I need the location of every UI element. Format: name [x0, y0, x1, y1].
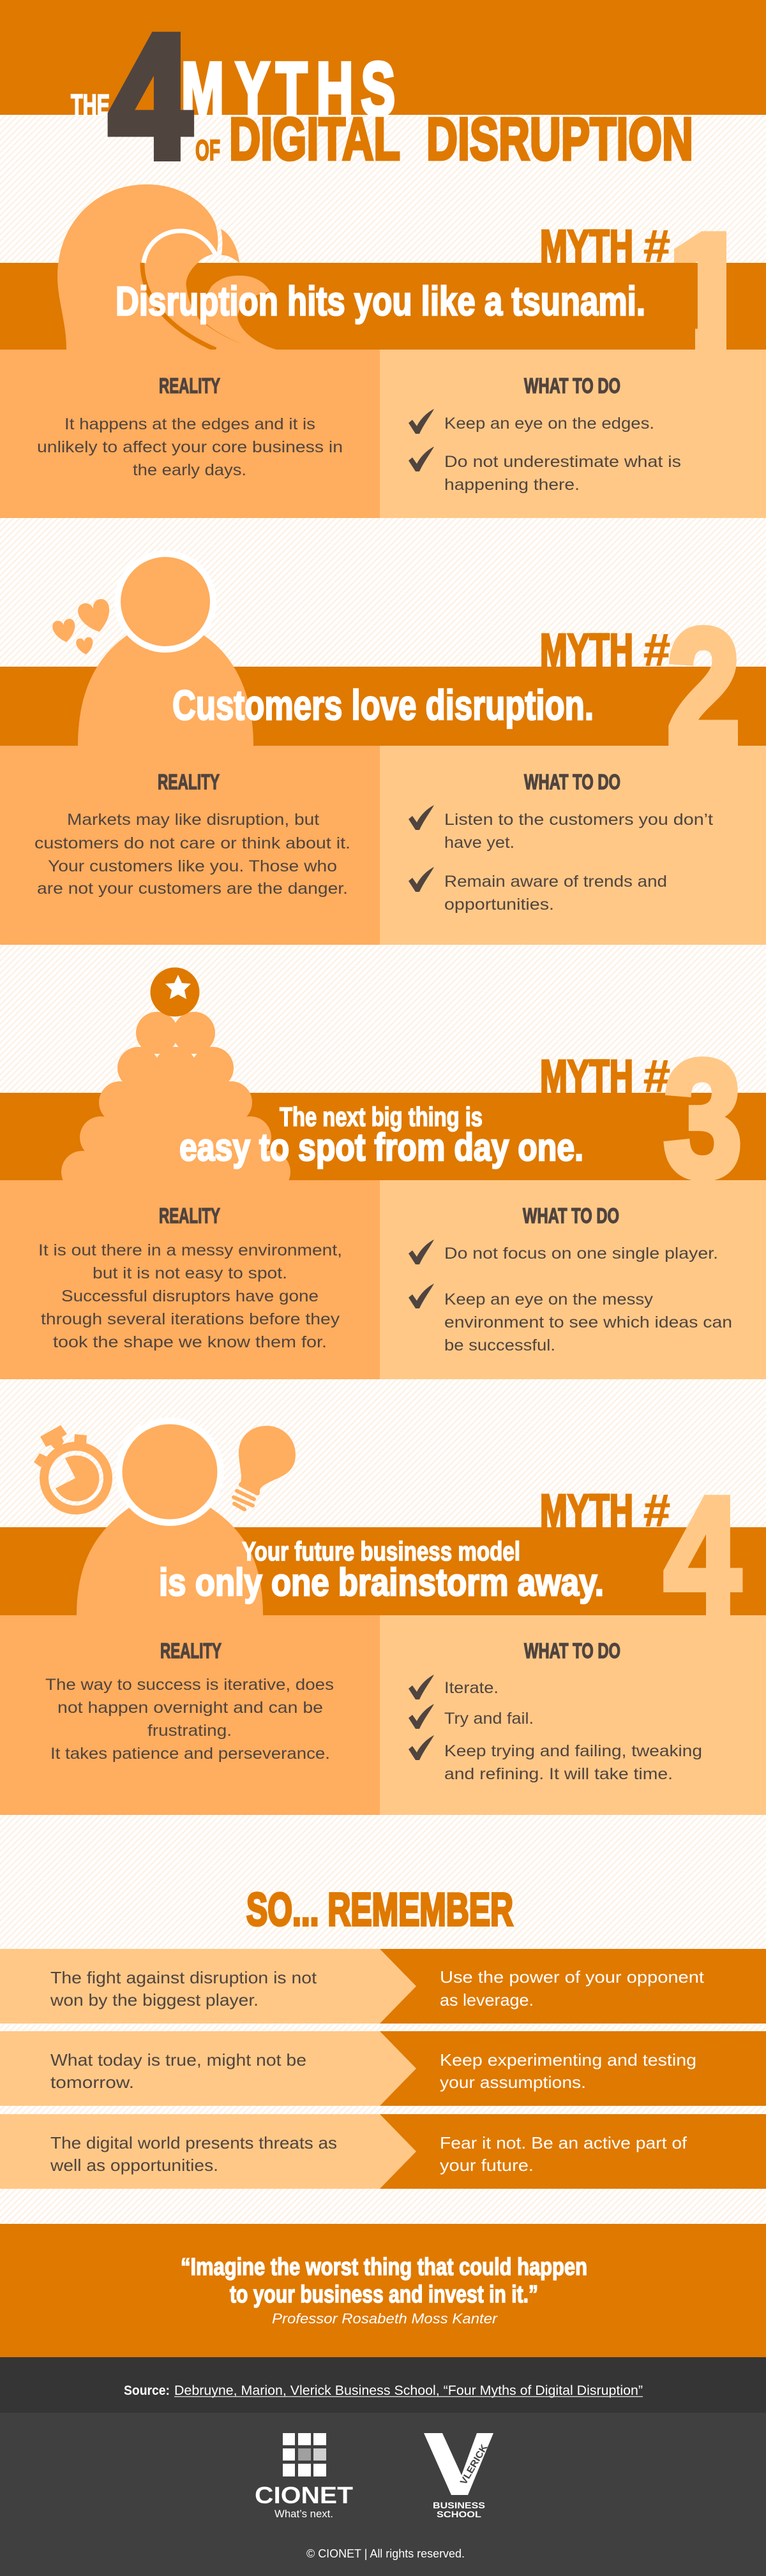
remember row 2 — [0, 2031, 766, 2106]
quote panel: Professor Rosabeth Moss Kanter — [272, 2311, 499, 2327]
what to do box: opportunities. — [444, 896, 554, 914]
remember row 3 — [0, 2114, 766, 2189]
myth label: MYTH — [540, 1486, 633, 1536]
title — [71, 0, 693, 194]
panel: myth 3 — [0, 967, 766, 1379]
what to do box: Keep an eye on the messy — [444, 1291, 654, 1308]
reality box: Successful disruptors have gone — [61, 1287, 319, 1305]
reality box: REALITY — [159, 1204, 220, 1227]
panel: myth 4 — [0, 1418, 766, 1815]
what to do box: WHAT TO DO — [524, 770, 620, 794]
remember row 1 — [0, 1949, 766, 2024]
logo: CIONET: What’s next. — [274, 2508, 333, 2520]
what to do box: environment to see which ideas can — [444, 1314, 732, 1331]
myth headline: easy to spot from day one. — [179, 1126, 583, 1169]
myth label: # — [643, 1486, 670, 1536]
reality box: It happens at the edges and it is — [64, 415, 315, 433]
remember row 3: Fear it not. Be an active part of — [440, 2133, 687, 2152]
what to do box: Listen to the customers you don’t — [444, 811, 713, 829]
logo: CIONET — [255, 2433, 353, 2520]
reality box: but it is not easy to spot. — [93, 1264, 287, 1282]
logo: CIONET: CIONET — [255, 2482, 353, 2508]
logo: Vlerick: VLERICK — [458, 2443, 490, 2487]
icon: person with hearts — [52, 551, 253, 746]
what to do box: Do not underestimate what is — [444, 453, 681, 471]
number 1: 1 — [663, 200, 755, 385]
what to do box: WHAT TO DO — [523, 1204, 619, 1227]
reality box: It takes patience and perseverance. — [50, 1745, 330, 1763]
myth label: MYTH — [540, 1051, 633, 1102]
reality box — [0, 1615, 380, 1815]
what to do box: be successful. — [444, 1336, 555, 1354]
what to do box: WHAT TO DO — [524, 374, 620, 397]
title: THE — [71, 88, 110, 122]
title: 4 — [109, 0, 191, 194]
myth label: # — [643, 1051, 670, 1102]
source bar: Debruyne, Marion, Vlerick Business School, “Four Myths of Digital Disruption” — [174, 2383, 643, 2398]
myth label: MYTH — [540, 222, 633, 272]
what to do box — [380, 350, 766, 518]
remember row 2: your assumptions. — [440, 2073, 586, 2092]
number 3: 3 — [664, 1026, 742, 1211]
what to do box: have yet. — [444, 834, 514, 852]
what to do box: Do not focus on one single player. — [444, 1245, 718, 1262]
myth headline: is only one brainstorm away. — [159, 1561, 604, 1604]
reality box — [0, 746, 380, 945]
what to do box: and refining. It will take time. — [444, 1765, 673, 1783]
reality box: REALITY — [159, 374, 220, 397]
remember row 3: well as opportunities. — [50, 2156, 218, 2175]
logo: Vlerick — [424, 2433, 493, 2519]
remember row 1: as leverage. — [440, 1990, 534, 2010]
reality box: Markets may like disruption, but — [67, 811, 319, 829]
reality box: the early days. — [133, 461, 246, 479]
icon: wave — [57, 184, 695, 350]
myth headline: Disruption hits you like a tsunami. — [116, 278, 645, 324]
icon: person with stopwatch and lightbulb — [34, 1418, 296, 1615]
icon: pyramid of circles with star — [61, 967, 290, 1193]
reality box: frustrating. — [147, 1722, 232, 1740]
remember row 1: The fight against disruption is not — [50, 1968, 317, 1987]
number 4: 4 — [665, 1463, 740, 1647]
what to do box: Try and fail. — [444, 1710, 534, 1728]
remember row 1: Use the power of your opponent — [440, 1967, 705, 1987]
copyright: © CIONET | All rights reserved. — [306, 2547, 465, 2560]
what to do box — [380, 1180, 766, 1379]
source bar — [0, 2357, 766, 2413]
remember row 2: Keep experimenting and testing — [440, 2050, 696, 2069]
myth headline: The next big thing is — [280, 1102, 483, 1132]
reality box: REALITY — [160, 1639, 222, 1662]
remember row 3: The digital world presents threats as — [50, 2133, 337, 2152]
reality box: unlikely to affect your core business in — [37, 438, 343, 456]
quote panel: to your business and invest in it.” — [230, 2281, 538, 2308]
remember row 3: your future. — [440, 2156, 534, 2175]
footer — [0, 2413, 766, 2576]
reality box: are not your customers are the danger. — [37, 880, 348, 898]
number 2: 2 — [667, 595, 740, 776]
reality box: customers do not care or think about it. — [34, 834, 350, 852]
what to do box: Remain aware of trends and — [444, 873, 667, 891]
reality box — [0, 350, 380, 518]
reality box — [0, 1180, 380, 1379]
source bar: Source: — [124, 2383, 170, 2398]
header band — [0, 0, 766, 115]
title: DIGITAL — [229, 105, 400, 172]
myth label: MYTH — [540, 625, 633, 676]
what to do box — [380, 1615, 766, 1815]
quote panel — [0, 2224, 766, 2357]
myth headline: Your future business model — [242, 1536, 520, 1566]
reality box: took the shape we know them for. — [53, 1333, 327, 1351]
myth headline: Customers love disruption. — [172, 681, 594, 729]
what to do box: WHAT TO DO — [524, 1639, 620, 1662]
reality box: not happen overnight and can be — [57, 1699, 323, 1717]
heading: so remember: SO... REMEMBER — [246, 1884, 513, 1936]
remember row 2: tomorrow. — [50, 2073, 134, 2092]
remember row 1: won by the biggest player. — [50, 1990, 259, 2010]
title: MYTHS — [181, 48, 395, 131]
logo: Vlerick: SCHOOL — [437, 2509, 482, 2519]
reality box: It is out there in a messy environment, — [38, 1241, 342, 1259]
reality box: REALITY — [158, 770, 220, 794]
what to do box — [380, 746, 766, 945]
what to do box: Keep trying and failing, tweaking — [444, 1742, 702, 1760]
reality box: through several iterations before they — [41, 1310, 340, 1328]
reality box: The way to success is iterative, does — [45, 1676, 334, 1694]
logo: Vlerick: BUSINESS — [433, 2500, 485, 2510]
quote panel: “Imagine the worst thing that could happen — [181, 2254, 587, 2281]
reality box: Your customers like you. Those who — [48, 857, 337, 875]
remember row 2: What today is true, might not be — [50, 2050, 306, 2069]
panel: myth 1 — [0, 184, 766, 518]
myth label: # — [643, 625, 670, 676]
what to do box: Iterate. — [444, 1679, 499, 1697]
myth headline — [179, 1102, 583, 1169]
what to do box: happening there. — [444, 476, 580, 494]
panel: myth 2 — [0, 551, 766, 945]
what to do box: Keep an eye on the edges. — [444, 415, 654, 433]
myth label: # — [643, 222, 670, 272]
myth headline — [159, 1536, 604, 1604]
title: OF — [195, 134, 220, 167]
